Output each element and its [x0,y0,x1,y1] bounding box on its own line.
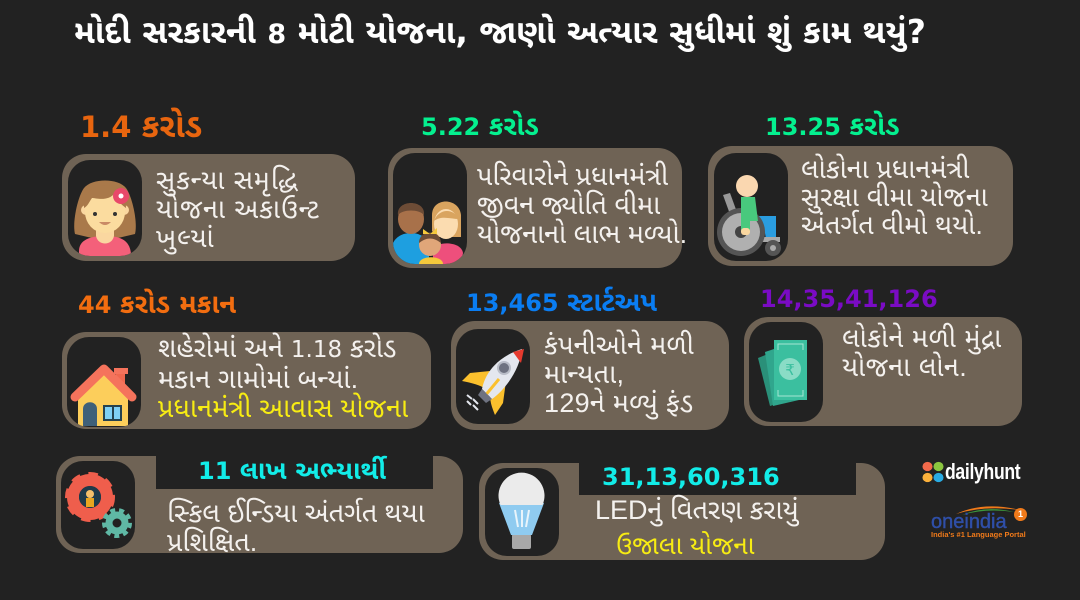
panel: Suraksha Bima [708,146,1013,266]
text: Mudra description: યોજના લોન. [842,352,967,382]
text: Suraksha description: અંતર્ગત વીમો થયો. [801,210,983,240]
icon: girl [68,160,142,256]
icon: house [67,337,141,427]
panel: Jeevan Jyoti [388,148,682,268]
text: Mudra description: લોકોને મળી મુંદ્રા [842,323,1002,353]
panel: Sukanya Samriddhi [62,154,355,261]
logo: oneindia: oneindia [931,511,1007,533]
text: Jeevan Jyoti description: જીવન જ્યોતિ વીમા [477,190,660,220]
icon: bulb [485,468,559,556]
text: Awas description: શહેરોમાં અને 1.18 કરોડ [158,333,396,363]
panel: Mudra [744,317,1022,426]
text: Ujala yojana: ઉજાલા યોજના [616,530,755,560]
notch: heading tab [579,463,856,495]
panel: Awas Yojana [62,332,431,429]
logo: oneindia: 1 [1018,509,1023,519]
notch: heading tab [156,456,433,489]
text: Skill India description: સ્કિલ ઈન્ડિયા અંતર્ગત થયા [167,498,425,528]
heading: 5.22 crore: 5.22 કરોડ [421,111,539,142]
heading: 11 lakh trainees: 11 લાખ અભ્યાર્થી [198,456,386,486]
text: Jeevan Jyoti description: પરિવારોને પ્રધાનમંત્રી [477,161,668,191]
panel: Ujala [479,463,885,560]
logo: oneindia: India's #1 Language Portal [931,530,1026,539]
heading: loan count: 14,35,41,126 [760,285,938,313]
icon: gears [61,461,135,549]
heading: 44 crore houses: 44 કરોડ મકાન [78,289,236,320]
title: મોદી સરકારની 8 મોટી યોજના, જાણો અત્યાર સુધીમાં શું કામ થયું? [74,12,926,51]
text: Awas description [158,332,408,423]
icon: rocket [456,329,530,424]
text: Jeevan Jyoti description [477,160,687,249]
text: Jeevan Jyoti description: યોજનાનો લાભ મળ્યો. [477,219,687,249]
heading: 13,465 startups: 13,465 સ્ટાર્ટઅપ [466,287,657,318]
text: Sukanya description: સુકન્યા સમૃદ્ધિ [156,165,298,195]
heading: 1.4 crore: 1.4 કરોડ [80,106,202,145]
text: Sukanya description [156,164,320,254]
text: Suraksha description: સુરક્ષા વીમા યોજના [801,182,988,212]
logo: oneindia [931,506,1027,539]
text: LED description: LEDનું વિતરણ કરાયું [595,495,799,525]
icon: family [393,153,467,264]
text: Suraksha description: લોકોના પ્રધાનમંત્રી [801,154,969,184]
panel: Skill India [56,456,463,553]
text: Suraksha description [801,154,988,240]
icon: banknotes [749,322,823,422]
text: Startups description: માન્યતા, [544,359,624,389]
text: Sukanya description: યોજના અકાઉન્ટ [156,194,320,224]
icon: banknotes: ₹ [785,361,795,379]
text: Sukanya description: ખુલ્યાં [156,223,215,253]
text: Startups description: કંપનીઓને મળી [544,330,694,360]
text: Startups description: 129ને મળ્યું ફંડ [544,388,693,418]
logo: dailyhunt: dailyhunt [945,459,1020,484]
text: Awas description: પ્રધાનમંત્રી આવાસ યોજના [158,393,408,423]
text: Mudra description [842,322,1002,382]
text: Skill India description: પ્રશિક્ષિત. [167,527,257,557]
heading: 13.25 crore: 13.25 કરોડ [765,111,899,142]
text: Awas description: મકાન ગામોમાં બન્યાં. [158,364,358,394]
text: Skill India description [167,498,425,557]
heading: LED count: 31,13,60,316 [602,463,780,491]
panel: Startups [451,321,729,430]
text: Startups description [544,330,694,420]
icon: wheelchair [714,153,788,261]
